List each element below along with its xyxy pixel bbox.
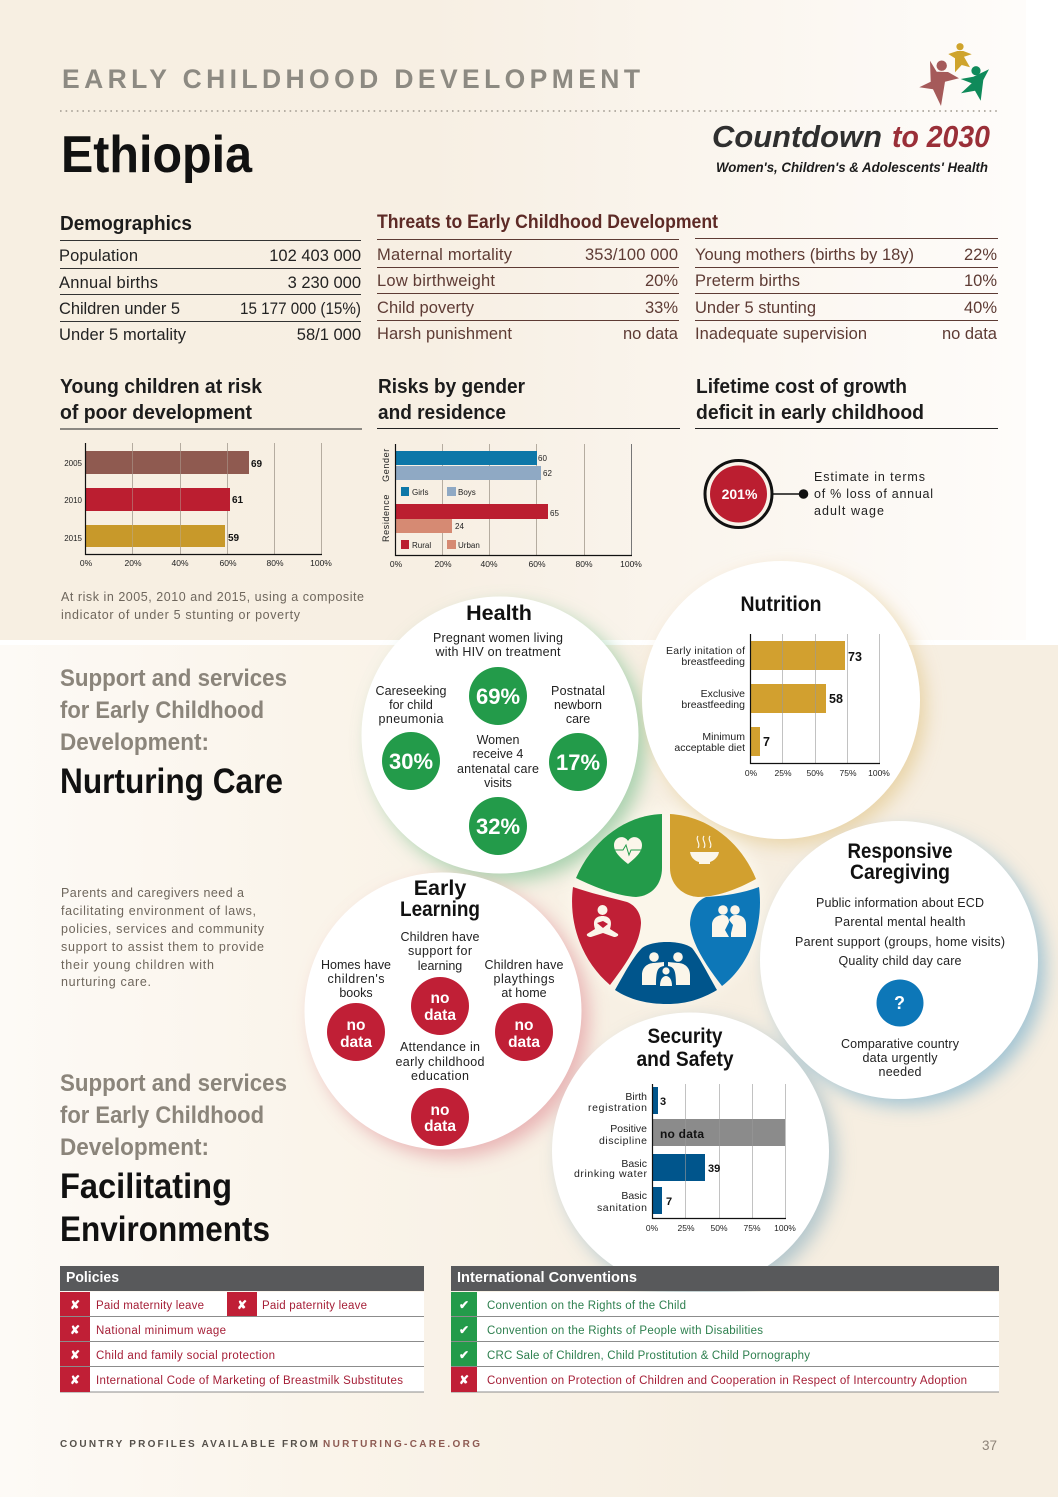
metric: ECE attendance no data: data [424,1118,456,1135]
panel: health: Postnatal [551,684,605,698]
row: paid maternity leave [60,1292,204,1316]
bar chart: gender and residence: 0% [390,559,403,569]
page header title: EARLY CHILDHOOD DEVELOPMENT [62,64,640,94]
Countdown to 2030 wordmark: Women's, Children's & Adolescents' Health [716,160,988,175]
heading: facilitating environments: for Early Childhood [60,1102,264,1129]
bar chart: children at risk by year: 60% [219,558,237,568]
panel: demographics: Children under 5 [59,300,180,318]
panel: demographics: Under 5 mortality [59,326,187,344]
callout: 201% lifetime cost: of % loss of annual [814,487,933,501]
row: rights of the child: ✔ [459,1298,469,1312]
heading: nurturing care: Development: [60,729,209,756]
bar chart: security and safety: Positive [610,1123,647,1135]
metric: pneumonia careseeking 30%: 30% [389,749,433,774]
icon: question mark: ? [894,993,905,1013]
bar chart: gender and residence: 60 [538,454,547,463]
heading: nurturing care: for Early Childhood [60,697,264,724]
text block: parents and caregivers: Parents and caregivers need a [61,886,244,900]
bar chart: children at risk by year: 2010 [64,496,83,505]
panel: responsive caregiving: Public information about ECD [816,896,984,910]
row: intercountry adoption [451,1367,967,1392]
callout: 201% lifetime cost: Estimate in terms [814,470,925,484]
text block: parents and caregivers: support to assist them to provide [61,940,264,954]
text block: parents and caregivers: policies, services and community [61,922,265,936]
row: rights of people with disabilities: ✔ [459,1323,469,1337]
panel: health: with HIV on treatment [434,645,561,659]
panel: early learning: children's [328,972,384,986]
panel: demographics: Demographics [60,212,192,235]
panel: early learning: Children have [400,930,480,944]
panel: threats to early childhood development: Low birthweight [377,272,495,290]
row: national minimum wage [60,1317,226,1341]
icon: seated child with book [587,905,618,937]
bar chart: security and safety: 25% [677,1223,695,1233]
Countdown to 2030 wordmark [712,119,990,175]
wheel segment: security and safety [615,942,717,1004]
bar chart: security and safety: 3 [660,1096,666,1108]
icon: parents holding infant [712,905,746,937]
panel: demographics: Annual births [59,274,158,292]
heading: nurturing care: Support and services [60,665,287,692]
metric: children's books no data [327,1003,385,1061]
panel: demographics [59,212,361,344]
Countdown to 2030 wordmark: Countdown [712,119,882,154]
bar chart: security and safety: 100% [774,1223,796,1233]
row: code of marketing: ✘ [70,1373,80,1387]
bar chart: gender and residence: 80% [575,559,593,569]
row: intercountry adoption: Convention on Protection of Children and Cooperation in Respect of Intercountry Adoption [487,1375,967,1387]
bar chart: gender and residence: Urban [458,541,480,550]
panel: threats to early childhood development [377,211,998,343]
panel: health: Pregnant women living [433,631,563,645]
panel: policies: Policies [66,1269,119,1286]
panel: threats to early childhood development: 10% [964,272,997,290]
panel: early learning: support for [408,944,472,958]
heading: risks by gender and residence: Risks by gender [378,375,525,398]
wheel segment: responsive caregiving [690,887,760,986]
bar chart: security and safety: Basic [621,1158,647,1170]
metric: children's books no data: data [340,1034,372,1051]
bar chart: children at risk by year: 61 [232,495,244,506]
bar chart: children at risk by year: 40% [171,558,189,568]
panel: responsive caregiving: Responsive [848,839,953,863]
callout: 201% lifetime cost: 201% [722,486,758,502]
heading: facilitating environments: Facilitating [60,1167,232,1206]
bar chart: security and safety: drinking water [574,1168,648,1180]
panel: threats to early childhood development: 22% [964,246,997,264]
panel: responsive caregiving: Comparative country [841,1037,960,1051]
metric: support for learning no data: no [431,990,449,1007]
panel: early learning: Homes have [321,958,391,972]
row: rights of the child: Convention on the Rights of the Child [487,1300,686,1312]
text block: parents and caregivers: facilitating environment of laws, [61,904,256,918]
heading: young children at risk: Young children at risk [60,375,263,398]
row: CRC sale of children: ✔ [459,1348,469,1362]
panel: international conventions: International Conventions [457,1269,637,1286]
metric: antenatal visits 32% [469,797,527,855]
metric: antenatal visits 32%: 32% [476,814,520,839]
panel: security and safety: Security [648,1024,723,1048]
panel: international conventions [451,1266,999,1392]
bar chart: gender and residence: Girls [412,488,428,497]
country name: Ethiopia [61,126,253,184]
bar chart: children at risk by year: 2015 [64,534,83,543]
bar chart: children at risk by year [64,443,332,568]
panel: health: Women [477,733,519,747]
callout: 201% lifetime cost [705,460,933,528]
bar chart: nutrition: Exclusive [701,688,745,700]
icon: family under arch [642,952,690,986]
chart note: indicator of under 5 stunting or poverty [61,608,301,622]
bar chart: nutrition: Minimum [702,731,745,743]
heading: risks by gender and residence: and residence [378,401,506,424]
bar chart: nutrition: breastfeeding [681,656,745,668]
panel: early learning: learning [418,959,462,973]
panel: threats to early childhood development: Threats to Early Childhood Development [377,211,718,233]
bar chart: children at risk by year: 0% [80,558,93,568]
heading: facilitating environments: Development: [60,1134,209,1161]
text block: parents and caregivers [61,886,265,989]
bar chart: security and safety [574,1084,796,1233]
bar chart: gender and residence: 62 [543,469,552,478]
bar chart: children at risk by year: 100% [310,558,332,568]
panel: health: Careseeking [376,684,447,698]
row: paid paternity leave [227,1292,367,1316]
bar chart: security and safety: registration [588,1102,647,1114]
bar chart: security and safety: discipline [599,1135,647,1147]
icon: heart with pulse [613,837,643,864]
panel: policies [60,1266,424,1392]
bar chart: gender and residence: 65 [550,509,559,518]
bar chart: children at risk by year: 2005 [64,459,83,468]
row: code of marketing [60,1367,403,1392]
bar chart: gender and residence: 60% [528,559,546,569]
bar chart: nutrition: 25% [774,768,792,778]
bar chart: nutrition: 58 [829,692,843,706]
panel: early learning [304,872,582,1150]
bar chart: security and safety: 39 [708,1163,720,1175]
panel: early learning: books [339,986,373,1000]
panel: responsive caregiving: Parent support (groups, home visits) [795,935,1005,949]
panel: responsive caregiving: Quality child day care [838,954,962,968]
heading: lifetime cost of growth deficit: deficit in early childhood [696,401,924,424]
panel: threats to early childhood development: 40% [964,299,997,317]
row: CRC sale of children [451,1342,810,1366]
panel: health: newborn [554,698,602,712]
chart note [61,590,364,622]
panel: threats to early childhood development: no data [942,325,998,343]
panel: health: visits [484,776,512,790]
metric: HIV treatment 69% [469,667,527,725]
panel: health: pneumonia [378,712,444,726]
panel: threats to early childhood development: Harsh punishment [377,325,512,343]
bar chart: nutrition: 7 [763,735,770,749]
bar chart: gender and residence [381,444,642,569]
metric: postnatal care 17%: 17% [556,750,600,775]
panel: early learning: Learning [400,897,480,921]
metric: postnatal care 17% [549,733,607,791]
bar chart: nutrition: 50% [806,768,824,778]
panel: health [362,596,638,874]
panel: threats to early childhood development: Maternal mortality [377,246,513,264]
circle shadows [313,569,1045,1297]
wheel segment: early learning [572,887,641,985]
bar chart: children at risk by year: 80% [266,558,284,568]
bar chart: gender and residence: Rural [412,541,431,550]
row: rights of people with disabilities: Convention on the Rights of People with Disabilities [487,1325,763,1337]
panel: demographics: 15 177 000 (15%) [240,300,361,318]
heading: risks by gender and residence [377,375,680,428]
row: intercountry adoption: ✘ [459,1373,469,1387]
row: paid maternity leave: Paid maternity leave [96,1300,204,1312]
footer [60,1439,480,1450]
metric: HIV treatment 69%: 69% [476,684,520,709]
panel: responsive caregiving: Parental mental health [834,915,966,929]
panel: nutrition [642,561,920,839]
icon: Countdown logo figures [919,43,989,106]
text block: parents and caregivers: their young children with [61,958,214,972]
icon: question mark [876,980,924,1026]
heading: facilitating environments: Support and services [60,1070,287,1097]
bar chart: children at risk by year: 69 [251,459,263,470]
bar chart: children at risk by year: 59 [228,533,240,544]
wheel segment: health [576,814,662,897]
bar chart: nutrition: 0% [745,768,758,778]
metric: playthings no data [495,1003,553,1061]
panel: health: receive 4 [473,747,523,761]
panel: threats to early childhood development: Under 5 stunting [695,299,816,317]
row: CRC sale of children: CRC Sale of Children, Child Prostitution & Child Pornography [487,1350,810,1362]
panel: early learning: playthings [494,972,554,986]
heading: nurturing care: Nurturing Care [60,762,283,801]
panel: demographics: 102 403 000 [269,247,361,265]
bar chart: nutrition: breastfeeding [681,699,745,711]
metric: playthings no data: no [515,1017,533,1034]
row: paid paternity leave: ✘ [237,1298,247,1312]
metric: pneumonia careseeking 30% [382,732,440,790]
heading: facilitating environments [60,1070,287,1249]
row: national minimum wage: National minimum wage [96,1325,226,1337]
bar chart: gender and residence: 20% [434,559,452,569]
panel: demographics: 58/1 000 [297,326,361,344]
heading: lifetime cost of growth deficit [695,375,998,428]
row: social protection: Child and family social protection [96,1350,275,1362]
bar chart: nutrition: acceptable diet [674,742,745,754]
wheel segment: nutrition [670,814,756,897]
panel: responsive caregiving: needed [878,1065,922,1079]
metric: support for learning no data: data [424,1007,456,1024]
row: rights of people with disabilities [451,1317,763,1341]
row: rights of the child [451,1292,686,1316]
panel: threats to early childhood development: 20% [645,272,678,290]
chart note: At risk in 2005, 2010 and 2015, using a composite [61,590,364,604]
bar chart: security and safety: Basic [621,1190,647,1202]
text block: parents and caregivers: nurturing care. [61,975,151,989]
metric: ECE attendance no data: no [431,1102,449,1119]
panel: nutrition: Nutrition [740,592,822,616]
bar chart: security and safety: 75% [743,1223,761,1233]
heading: facilitating environments: Environments [60,1210,270,1249]
panel: health: Health [466,601,532,625]
panel: threats to early childhood development: no data [623,325,679,343]
panel: security and safety: and Safety [636,1047,734,1071]
bar chart: nutrition: 75% [839,768,857,778]
icon: soup bowl [690,836,719,864]
heading: young children at risk [60,375,362,429]
bar chart: nutrition [666,634,890,778]
panel: threats to early childhood development: Preterm births [695,272,800,290]
bar chart: security and safety: no data [660,1127,704,1141]
row: paid maternity leave: ✘ [70,1298,80,1312]
panel: early learning: Children have [484,958,564,972]
bar chart: gender and residence: 24 [455,522,464,531]
metric: playthings no data: data [508,1034,540,1051]
row: social protection [60,1342,275,1366]
panel: responsive caregiving [760,821,1038,1099]
panel: demographics: Population [59,247,138,265]
panel: early learning: at home [501,986,547,1000]
bar chart: security and safety: Birth [625,1091,647,1103]
bar chart: gender and residence: 40% [480,559,498,569]
bar chart: security and safety: 7 [666,1196,672,1208]
panel: early learning: education [411,1069,469,1083]
panel: threats to early childhood development: 33% [645,299,678,317]
heading: young children at risk: of poor development [60,401,252,424]
bar chart: nutrition: Early initation of [666,645,745,657]
panel: health: antenatal care [457,762,539,776]
panel: responsive caregiving: Caregiving [850,860,950,884]
heading: lifetime cost of growth deficit: Lifetime cost of growth [696,375,907,398]
bar chart: security and safety: 50% [710,1223,728,1233]
bar chart: gender and residence: Gender [381,448,391,482]
panel: early learning: Early [414,876,466,900]
panel: health: care [566,712,590,726]
panel: threats to early childhood development: 353/100 000 [585,246,678,264]
panel: health: for child [389,698,433,712]
panel: responsive caregiving: data urgently [862,1051,938,1065]
panel: threats to early childhood development: Inadequate supervision [695,325,867,343]
panel: early learning: early childhood [396,1055,485,1069]
page number: 37 [982,1438,997,1453]
metric: children's books no data: no [347,1017,365,1034]
footer: COUNTRY PROFILES AVAILABLE FROM [60,1439,318,1450]
bar chart: gender and residence: 100% [620,559,642,569]
bar chart: gender and residence: Boys [458,488,476,497]
panel: demographics: 3 230 000 [288,274,361,292]
panel: security and safety [552,1012,829,1290]
heading: nurturing care [60,665,287,801]
bar chart: security and safety: sanitation [597,1202,647,1214]
row: paid paternity leave: Paid paternity leave [262,1300,367,1312]
panel: threats to early childhood development: Young mothers (births by 18y) [695,246,914,264]
callout: 201% lifetime cost: adult wage [814,504,884,518]
metric: ECE attendance no data [411,1088,469,1146]
panel: threats to early childhood development: Child poverty [377,299,475,317]
bar chart: nutrition: 100% [868,768,890,778]
bar chart: gender and residence: Residence [381,494,391,542]
bar chart: nutrition: 73 [848,650,862,664]
metric: support for learning no data [411,977,469,1035]
bar chart: children at risk by year: 20% [124,558,142,568]
bar chart: security and safety: 0% [646,1223,659,1233]
footer: NURTURING-CARE.ORG [323,1439,480,1450]
row: code of marketing: International Code of Marketing of Breastmilk Substitutes [96,1375,403,1387]
Countdown to 2030 wordmark: to 2030 [892,119,990,154]
panel: early learning: Attendance in [400,1040,480,1054]
row: social protection: ✘ [70,1348,80,1362]
row: national minimum wage: ✘ [70,1323,80,1337]
nurturing care wheel [572,814,760,1004]
